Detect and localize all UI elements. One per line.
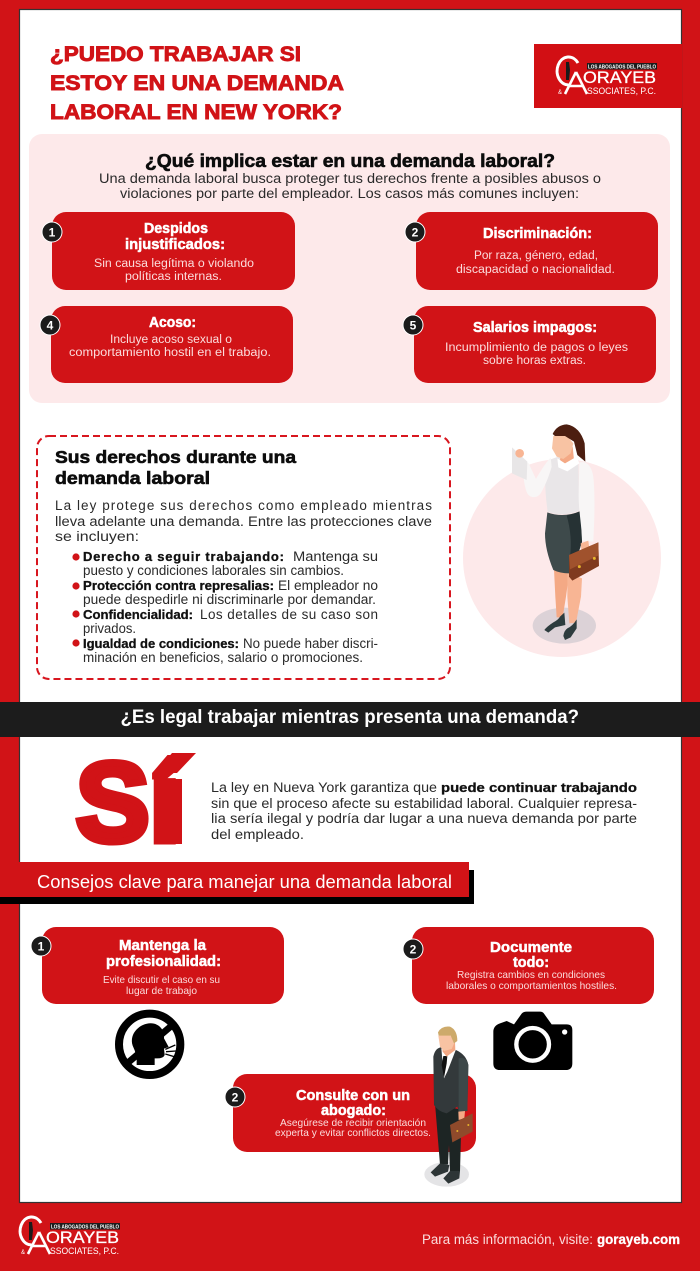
paragraph: la ley en Nueva York: lia sería ilegal y podría dar lugar a una nueva demanda por parte <box>211 811 637 826</box>
card 1: despidos: políticas internas. <box>125 271 222 283</box>
card 5: salarios: Incumplimiento de pagos o leyes <box>445 342 628 354</box>
panel: qué implica <box>29 134 670 403</box>
card 2: discriminación: Por raza, género, edad, <box>474 250 598 262</box>
tip card 2: documente <box>403 927 654 1004</box>
footer text: Para más información, visite: <box>422 1232 593 1247</box>
logo: Gorayeb & Associates footer <box>20 1217 120 1257</box>
title: LABORAL EN NEW YORK? <box>50 101 342 124</box>
card 1: despidos: injustificados: <box>125 237 225 253</box>
tip card 2: documente: Registra cambios en condiciones <box>457 969 605 981</box>
intro text <box>99 171 601 201</box>
paragraph: la ley en Nueva York: La ley en Nueva York garantiza que <box>211 780 437 795</box>
section band: es legal trabajar: ¿Es legal trabajar mientras presenta una demanda? <box>120 707 579 728</box>
card 4: acoso <box>40 306 293 383</box>
tip card 1: profesionalidad: lugar de trabajo <box>126 985 197 997</box>
paragraph: la ley protege: La ley protege sus derechos como empleado mientras <box>55 498 432 513</box>
footer text <box>422 1231 680 1247</box>
card 4: acoso: Incluye acoso sexual o <box>110 334 232 346</box>
icon: no talking <box>119 1014 180 1075</box>
tip card 1: profesionalidad: profesionalidad: <box>106 954 221 970</box>
tip card 3: consulte con un abogado: abogado: <box>321 1103 386 1119</box>
list item: confidencialidad: Los detalles de su caso son <box>200 607 378 622</box>
footer text: gorayeb.com <box>597 1231 680 1247</box>
logo: Gorayeb & Associates footer: ORAYEB <box>46 1229 119 1247</box>
illustration: woman with briefcase <box>463 424 661 657</box>
logo: Gorayeb & Associates header: SSOCIATES, P.C. <box>587 86 656 97</box>
card 1: despidos: 1 <box>49 226 56 240</box>
card 2: discriminación: 2 <box>412 226 419 240</box>
card 4: acoso: comportamiento hostil en el trabajo. <box>69 347 271 359</box>
list item: derecho a seguir trabajando: puesto y condiciones laborales sin cambios. <box>83 563 344 578</box>
big word: Sí: Sí <box>76 740 184 865</box>
heading: qué implica: ¿Qué implica estar en una demanda laboral? <box>145 150 555 171</box>
panel: sus derechos <box>37 436 450 679</box>
intro text: violaciones por parte del empleador. Los casos más comunes incluyen: <box>120 186 579 201</box>
card 4: acoso: 4 <box>47 318 54 332</box>
section band: es legal trabajar <box>0 702 700 737</box>
paragraph: la ley protege: lleva adelante una demanda. Entre las protecciones clave <box>55 514 432 529</box>
tip card 2: documente: Documente <box>490 940 572 956</box>
tip card 2: documente: laborales o comportamientos hostiles. <box>446 980 617 992</box>
tip card 1: profesionalidad <box>31 927 284 1004</box>
list item: derecho a seguir trabajando <box>72 549 378 578</box>
card 1: despidos <box>42 212 295 290</box>
logo: Gorayeb & Associates footer: & <box>21 1250 25 1256</box>
list item: confidencialidad: privados. <box>83 621 136 636</box>
card 1: despidos: Sin causa legítima o violando <box>94 258 254 270</box>
heading: sus derechos <box>55 447 296 488</box>
tip card 1: profesionalidad: 1 <box>38 940 45 954</box>
list item: derecho a seguir trabajando: Derecho a seguir trabajando: <box>83 549 284 564</box>
tip card 3: consulte con un abogado: Asegúrese de recibir orientación <box>280 1117 426 1129</box>
intro text: Una demanda laboral busca proteger tus derechos frente a posibles abusos o <box>99 171 601 186</box>
tip card 3: consulte con un abogado: experta y evitar conflictos directos. <box>275 1127 431 1139</box>
tip card 3: consulte con un abogado: Consulte con un <box>296 1088 410 1104</box>
list item: protección contra represalias: Protección contra represalias: <box>83 578 274 593</box>
card 4: acoso: Acoso: <box>149 315 196 331</box>
paragraph: la ley en Nueva York: puede continuar trabajando <box>441 780 637 795</box>
tip card 2: documente: todo: <box>513 955 549 971</box>
list item: protección contra represalias <box>72 578 378 607</box>
list item: confidencialidad: Confidencialidad: <box>83 607 193 622</box>
logo: Gorayeb & Associates footer: SSOCIATES, P.C. <box>50 1246 119 1257</box>
list item: protección contra represalias: puede despedirle ni discriminarle por demandar. <box>83 592 376 607</box>
paragraph: la ley en Nueva York: del empleado. <box>211 827 304 842</box>
logo: Gorayeb & Associates header <box>534 44 682 108</box>
tip card 3: consulte con un abogado <box>225 1074 476 1152</box>
heading: sus derechos: Sus derechos durante una <box>55 447 296 467</box>
tip card 2: documente: 2 <box>410 942 417 956</box>
logo: Gorayeb & Associates header: & <box>558 90 562 96</box>
list item: protección contra represalias: El empleador no <box>278 578 378 593</box>
title: ¿PUEDO TRABAJAR SI <box>50 43 301 66</box>
logo: Gorayeb & Associates header: LOS ABOGADOS DEL PUEBLO <box>588 64 657 70</box>
card 5: salarios: Salarios impagos: <box>473 320 597 336</box>
logo: Gorayeb & Associates header: ORAYEB <box>583 69 656 87</box>
list item: confidencialidad <box>72 607 378 636</box>
tip card 3: consulte con un abogado: 2 <box>232 1090 239 1104</box>
paragraph: la ley en Nueva York <box>211 780 637 842</box>
list item: derecho a seguir trabajando: Mantenga su <box>293 549 378 564</box>
card 2: discriminación <box>405 212 658 290</box>
logo: Gorayeb & Associates footer: LOS ABOGADOS DEL PUEBLO <box>51 1224 120 1230</box>
tip card 1: profesionalidad: Evite discutir el caso en su <box>103 974 220 986</box>
heading: sus derechos: demanda laboral <box>55 468 210 488</box>
list item: igualdad de condiciones: No puede haber discri- <box>243 636 378 651</box>
card 1: despidos: Despidos <box>144 221 208 237</box>
card 2: discriminación: Discriminación: <box>483 226 592 242</box>
card 2: discriminación: discapacidad o nacionalidad. <box>456 264 615 276</box>
card 5: salarios <box>403 306 656 383</box>
title <box>50 43 344 124</box>
paragraph: la ley en Nueva York: sin que el proceso afecte su estabilidad laboral. Cualquier represa- <box>211 796 637 811</box>
paragraph: la ley protege <box>55 498 432 544</box>
icon: camera <box>493 1012 572 1070</box>
banner: consejos clave: Consejos clave para manejar una demanda laboral <box>37 872 452 892</box>
tip card 1: profesionalidad: Mantenga la <box>119 938 207 954</box>
list item: igualdad de condiciones: Igualdad de condiciones: <box>83 636 239 651</box>
banner: consejos clave <box>0 862 474 904</box>
paragraph: la ley protege: se incluyen: <box>55 529 139 544</box>
list item: igualdad de condiciones: minación en beneficios, salario o promociones. <box>83 650 363 665</box>
title: ESTOY EN UNA DEMANDA <box>50 72 344 95</box>
illustration: man with briefcase <box>424 1027 473 1187</box>
card 5: salarios: 5 <box>410 318 417 332</box>
list item: igualdad de condiciones <box>72 636 378 665</box>
card 5: salarios: sobre horas extras. <box>483 355 586 367</box>
